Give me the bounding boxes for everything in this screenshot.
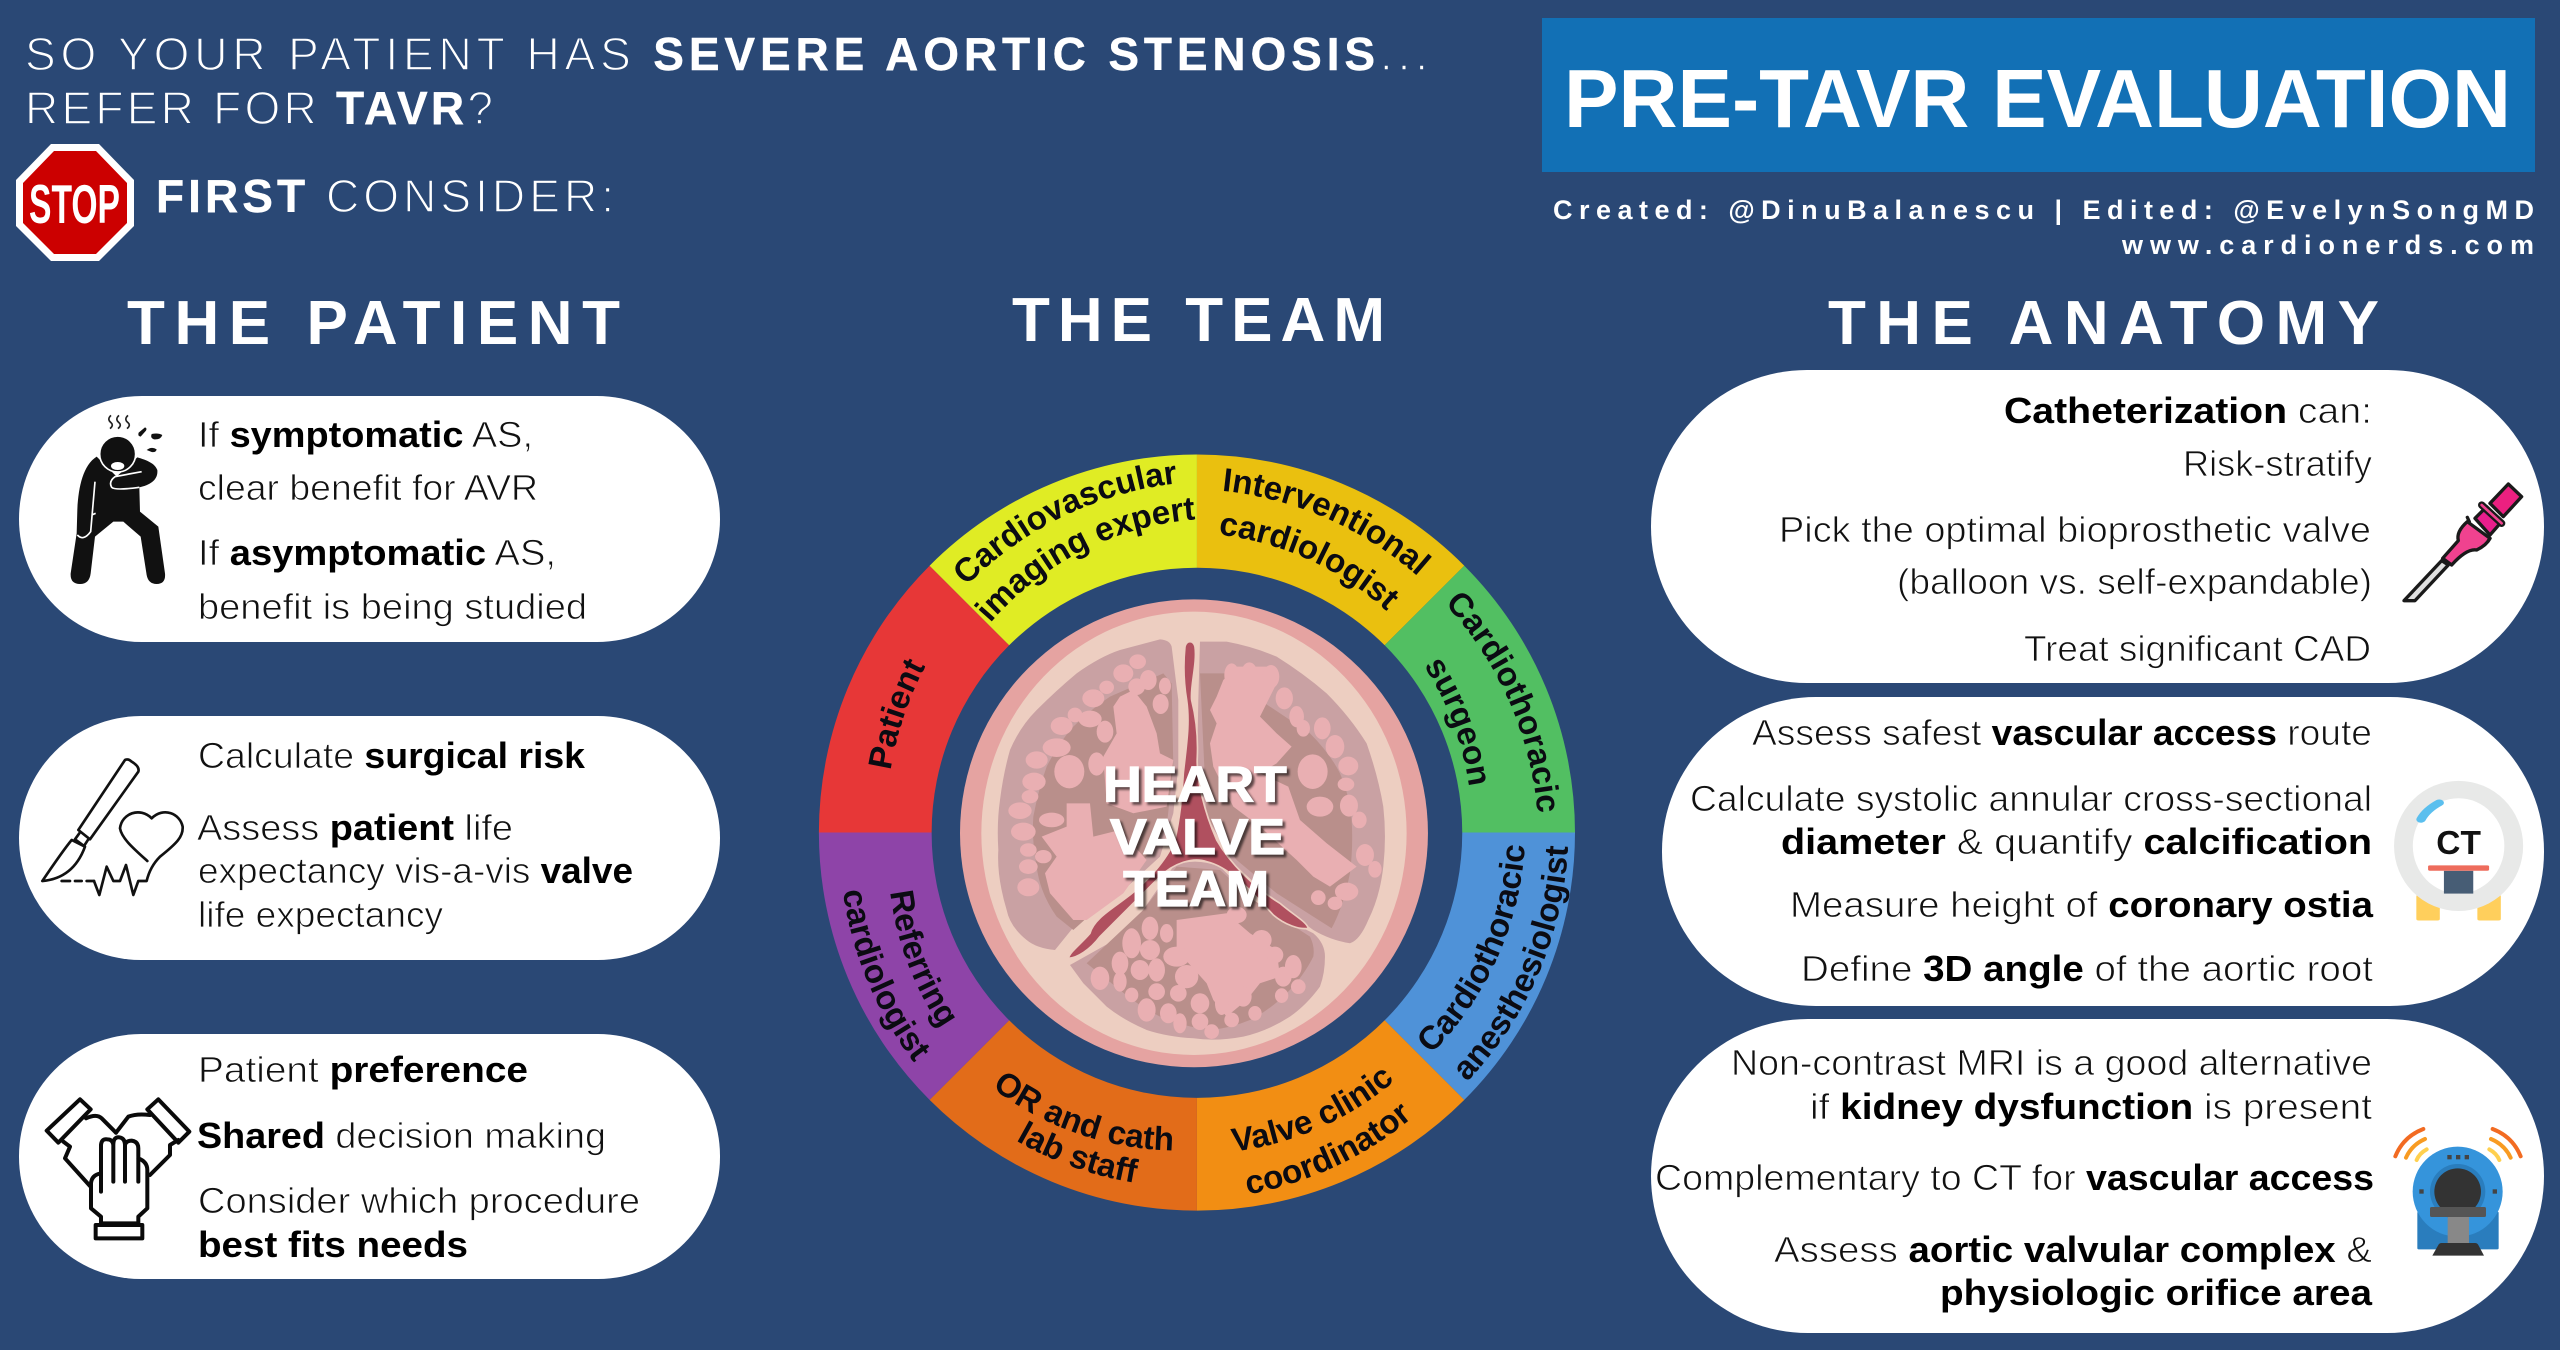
- text: patient preference: Patient preference: [198, 1049, 528, 1090]
- text: complementary to CT: Complementary to CT for vascular access: [1655, 1157, 2374, 1198]
- heading: the team: THE TEAM: [1012, 286, 1385, 355]
- icon: stop sign: [16, 144, 134, 261]
- icon: person with chest pain: [71, 415, 165, 584]
- text: non-contrast MRI: Non-contrast MRI is a good alternative: [1731, 1042, 2372, 1083]
- text: symptomatic: If symptomatic AS,: [198, 414, 533, 455]
- panel: surgical risk: [19, 716, 720, 960]
- heading: the anatomy: THE ANATOMY: [1828, 289, 2379, 358]
- icon: catheter: [2404, 484, 2522, 601]
- text: best fits needs: best fits needs: [198, 1224, 468, 1265]
- text: risk-stratify: Risk-stratify: [2183, 443, 2372, 484]
- wheel label: cardiothoracic surgeon: Cardiothoracic: [1450, 593, 1559, 812]
- text: balloon vs self-expandable: (balloon vs. self-expandable): [1897, 561, 2372, 602]
- panel: CT: [1662, 697, 2544, 1006]
- panel: patient symptoms: [19, 396, 720, 642]
- title banner: PRE-TAVR EVALUATION: [1564, 52, 2511, 145]
- credits line: authors: Created: @DinuBalanescu | Edited: @EvelynSongMD: [1553, 195, 2534, 225]
- panel: patient preference: [19, 1034, 720, 1279]
- heading line: severe aortic stenosis: SO YOUR PATIENT HAS SEVERE AORTIC STENOSIS...: [25, 28, 1428, 80]
- heading: the patient: THE PATIENT: [127, 289, 620, 358]
- wheel label: valve clinic coordinator: [1230, 1070, 1408, 1194]
- wheel label: cardiovascular imaging expert: Cardiovascular: [955, 465, 1176, 581]
- text: benefit studied: benefit is being studied: [198, 586, 587, 627]
- text: asymptomatic: If asymptomatic AS,: [198, 532, 556, 573]
- heading line: first consider: FIRST CONSIDER:: [156, 170, 614, 222]
- icon: stop sign: STOP: [29, 173, 120, 235]
- wheel label: interventional cardiologist: cardiologist: [1220, 518, 1398, 611]
- credits line: website: www.cardionerds.com: [2121, 230, 2534, 260]
- wheel label: OR and cath lab staff: [996, 1074, 1172, 1182]
- text: life expectancy: life expectancy: [198, 894, 443, 935]
- text: physiologic orifice area: physiologic orifice area: [1940, 1272, 2373, 1313]
- wheel label: cardiothoracic anesthesiologist: anesthesiologist: [1458, 846, 1570, 1080]
- panel: catheterization: [1651, 370, 2544, 683]
- wheel segments: [819, 454, 1575, 1211]
- wheel label: patient: Patient: [868, 658, 926, 768]
- center label: heart valve team: TEAM: [1123, 861, 1269, 917]
- text: kidney dysfunction: if kidney dysfunction is present: [1810, 1086, 2372, 1127]
- wheel label: valve clinic coordinator: coordinator: [1246, 1104, 1408, 1194]
- text: optimal valve: Pick the optimal bioprosthetic valve: [1779, 509, 2371, 550]
- icon: MRI scanner: [2395, 1129, 2521, 1256]
- icon: CT scanner: CT: [2436, 824, 2481, 862]
- icon: scalpel and heart: [42, 759, 183, 895]
- wheel label: cardiothoracic anesthesiologist: Cardiothoracic: [1419, 845, 1524, 1050]
- wheel label: referring cardiologist: Referring: [890, 890, 955, 1028]
- text: shared decision making: Shared decision making: [197, 1115, 606, 1156]
- text: patient life: Assess patient life: [197, 807, 513, 848]
- title banner: [1542, 18, 2535, 172]
- wheel label: cardiovascular imaging expert: imaging expert: [974, 498, 1196, 622]
- panel: MRI: [1651, 1019, 2544, 1333]
- icon: joined hands: [47, 1099, 189, 1238]
- heading line: refer for TAVR: REFER FOR TAVR?: [25, 82, 493, 134]
- valve illustration: [960, 599, 1428, 1067]
- center label: heart valve team: HEART: [1103, 757, 1287, 813]
- text: aortic valvular complex: Assess aortic valvular complex &: [1774, 1229, 2372, 1270]
- text: coronary ostia: Measure height of coronary ostia: [1790, 884, 2374, 925]
- wheel label: OR and cath lab staff: lab staff: [1018, 1120, 1140, 1182]
- text: vascular access route: Assess safest vascular access route: [1752, 712, 2372, 753]
- icon: CT scanner: [2394, 781, 2523, 921]
- wheel label: cardiothoracic surgeon: surgeon: [1426, 660, 1486, 785]
- wheel label: OR and cath lab staff: OR and cath: [996, 1074, 1172, 1150]
- center label: heart valve team: [1103, 757, 1287, 917]
- text: diameter and calcification: diameter & quantify calcification: [1781, 821, 2372, 862]
- text: expectancy vis-a-vis valve: expectancy vis-a-vis valve: [198, 850, 633, 891]
- chart: heart valve team wheel: [818, 454, 1575, 1211]
- wheel label: valve clinic coordinator: Valve clinic: [1230, 1070, 1392, 1150]
- center label: heart valve team: VALVE: [1110, 809, 1285, 865]
- header: question text: [25, 28, 1428, 222]
- wheel label: referring cardiologist: cardiologist: [844, 890, 930, 1062]
- text: surgical risk: Calculate surgical risk: [198, 735, 586, 776]
- text: treat CAD: Treat significant CAD: [2024, 628, 2371, 669]
- text: clear benefit: clear benefit for AVR: [198, 467, 538, 508]
- wheel label: interventional cardiologist: Interventional: [1224, 468, 1432, 575]
- text: catheterization can: Catheterization can:: [2004, 390, 2372, 431]
- text: 3D angle: Define 3D angle of the aortic root: [1801, 948, 2373, 989]
- credits: [1553, 195, 2534, 260]
- text: consider procedure: Consider which procedure: [198, 1180, 640, 1221]
- text: systolic annular: Calculate systolic annular cross-sectional: [1690, 778, 2372, 819]
